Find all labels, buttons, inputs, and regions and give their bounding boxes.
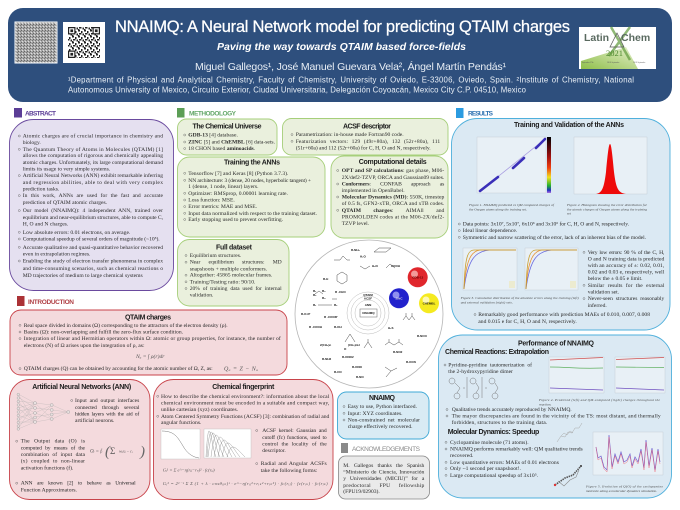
results bullets: data xyxy=(458,220,647,241)
heading: acknowledgements xyxy=(341,443,421,453)
figure 3 caption xyxy=(460,296,580,304)
dataset bullets: 20% of training data used for internal xyxy=(190,285,282,292)
dynamics bullets: Only ~1 second per snapshoot!. xyxy=(450,466,522,472)
dataset bullets xyxy=(185,253,282,299)
heading: performance: Performance of NNAIMQ xyxy=(518,340,595,347)
ACSF bullets xyxy=(291,132,440,152)
chemical universe bullets: GDB-13 [4] database. xyxy=(188,132,238,138)
authors: Miguel Gallegos¹, José Manuel Guevara Vela², Ángel Martín Pendás¹ xyxy=(195,60,506,73)
abstract bullets: and time-consuming scenarios, such as chemical reactions o xyxy=(23,266,163,272)
ANN bullets: activation functions (f). xyxy=(21,464,74,471)
QR code: link xyxy=(63,22,105,63)
figure 3 caption: and external validation (right) sets. xyxy=(461,300,513,304)
heading: chemical fingerprint: Chemical fingerprint xyxy=(212,384,275,391)
heading: results: RESULTS xyxy=(468,110,494,118)
functional group labels: R-OH xyxy=(334,325,342,329)
heading: introduction xyxy=(17,296,74,306)
fingerprint bullets: take the following forms: xyxy=(261,467,318,474)
ANN bullets: The Output data (O) is xyxy=(21,438,85,445)
ACSF bullets: (51r+60a) and 112 (52r+60a) for C, H, O and N, respectively. xyxy=(296,144,431,152)
logo: LatinXChem 2021: 28-30 September xyxy=(633,62,646,64)
dataset bullets: validation. xyxy=(190,293,214,299)
figure 5 caption xyxy=(585,484,663,493)
functional group labels: R₃ xyxy=(322,289,326,293)
fingerprint bullets: chemical environment must be encoded in a suitable and compact way, xyxy=(161,400,330,406)
abstract bullets: Accurate qualitative and quasi-quantitative behavior recovered xyxy=(23,245,163,251)
logo: LatinXChem 2021: Chem xyxy=(621,32,650,44)
figure captions 1 and 2: Figure 1. NNAIMQ predicted vs QM computed charges of xyxy=(468,203,555,207)
molecule sketches xyxy=(315,248,415,377)
heading: introduction: INTRODUCTION xyxy=(28,299,74,306)
abstract bullets: limits its usage to very simple systems. xyxy=(23,166,111,172)
sphere: GDB-13 xyxy=(408,267,428,287)
computational bullets: TZVP level. xyxy=(342,221,370,227)
abstract bullets: MD trajectories of medium to large chemical systems xyxy=(23,272,143,279)
functional group labels: R-ONO2 xyxy=(342,355,354,359)
abstract bullets: equilibrium and near-equilibrium structures, able to compute C, xyxy=(23,215,164,221)
acknowledgement text: (FPU19/02903). xyxy=(343,488,380,495)
heading: methodology xyxy=(177,108,237,118)
heading: training: Training the ANNs xyxy=(224,160,280,166)
abstract bullets: and regression abilities, able to deal with very complex xyxy=(23,180,163,186)
dynamics bullets: recovered. xyxy=(450,453,474,459)
panel: ACSF descriptor xyxy=(282,118,448,155)
heading: methodology: METHODOLOGY xyxy=(189,110,237,117)
reaction bullets: The mayor discrepancies are found in the vicinity of the TS: most distant, and thermally xyxy=(452,412,661,420)
QTAIM bullets: Nₐ = ∫ ρ(r)dr xyxy=(135,353,165,360)
training bullets xyxy=(184,170,318,223)
functional group labels: R -COOH xyxy=(309,325,322,329)
ANN bullets: artificial neurons. xyxy=(75,417,115,424)
results bullets: errors: 0.02 and 0.03 e, respectively, well xyxy=(588,270,665,276)
sphere: ZINC xyxy=(389,288,409,308)
equations: ACSF forms: Gᵢ² = 2¹⁻ᶻ Σ Σ (1 + λ · cosθᵢⱼₖ)ᶻ · e^−η(rᵢⱼ²+rᵢₖ²+rⱼₖ²) · fc(rᵢⱼ) · fc(rᵢₖ) · fc(rⱼₖ) xyxy=(163,481,328,486)
results bullets: errors: and 0.015 e for C, H, O and N, respectively. xyxy=(478,318,577,325)
subheading: chemical reactions: Chemical Reactions: Extrapolation xyxy=(445,349,549,356)
functional group labels: R-NO xyxy=(356,375,364,379)
figure 3: cumulative error curves xyxy=(463,248,578,290)
abstract bullets: The Quantum Theory of Atoms in Molecules (QTAIM) [1] xyxy=(23,146,163,153)
tautomerization bullets xyxy=(444,362,532,375)
functional group labels: H₂S xyxy=(388,326,394,330)
tautomerization bullets: Pyridine-pyridine tautomerization of xyxy=(448,362,532,368)
tautomerization bullets: the 2-hydroxypyridine dimer xyxy=(448,369,513,375)
subheading: molecular dynamics: Molecular Dynamics: Speedup xyxy=(448,429,539,436)
heading: ANN: Artificial Neural Networks (ANN) xyxy=(32,384,131,391)
acknowledgement text: “Ministerio de Ciencia, Innovación xyxy=(343,468,425,476)
computational bullets: of 0.5 fs, GFN2-xTB, ORCA and xTB codes. xyxy=(342,200,445,207)
results bullets: data: Symmetric and narrow scattering of the error, lack of an inherent bias of the model. xyxy=(463,234,647,241)
acknowledgement text: M. Gallegos thanks the Spanish xyxy=(343,463,425,469)
functional group labels: (CH₂)nH xyxy=(348,343,360,347)
dataset bullets: Near equilibrium structures: MD xyxy=(190,260,282,266)
abstract bullets: even in extrapolation regimes. xyxy=(23,252,91,258)
functional group labels: R-OCN xyxy=(406,360,416,364)
fingerprint bullets: Radial and Angular ACSFs xyxy=(261,461,327,467)
NNAIMQ bullets: Easy to use, Python interfaced. xyxy=(348,403,418,410)
chart: cutoff function xyxy=(161,429,200,459)
diagram: neural network xyxy=(17,393,70,430)
sphere: ChEMBL xyxy=(419,293,439,313)
abstract bullets: Artificial Neural Networks (ANN) exhibit remarkable inferring xyxy=(23,172,163,179)
panel: computational details xyxy=(331,156,448,238)
ANN bullets xyxy=(16,397,140,493)
figure 5 caption: Figure 5. Evolution of Q(O) of the cyclopamine xyxy=(585,484,663,488)
abstract bullets: Computational speedup of several orders of magnitude (~10⁵). xyxy=(23,236,160,242)
functional group labels: R-NH₂ xyxy=(351,248,360,252)
fingerprint bullets: Atom Centered Symmetry Functions (ACSF) [3]: combination of radial and xyxy=(161,413,330,420)
results bullets: errors: inferred. xyxy=(588,302,607,309)
abstract bullets: biology. xyxy=(23,140,41,146)
results bullets: errors: Never-seen structures reasonably xyxy=(588,296,665,302)
chemical universe bullets: ZINC [5] and ChEMBL [6] data-sets. xyxy=(188,140,276,146)
abstract bullets: H, O and N charges. xyxy=(23,222,69,228)
abstract bullets: Enabling the study of electron transfer phenomena in complex xyxy=(23,258,163,264)
nested target: NNAIMQ core: QTAIM xyxy=(363,293,373,297)
fingerprint bullets: How to describe the chemical environment?: information about the local xyxy=(161,393,330,400)
NNAIMQ bullets xyxy=(343,403,420,430)
functional group labels: R -CHO xyxy=(335,290,346,294)
molecule: cyclopamine skeletal xyxy=(557,423,582,442)
fingerprint bullets: descriptor. xyxy=(262,448,286,454)
training bullets: Loss function: MSE. xyxy=(188,196,235,204)
dynamics bullets: Low quantitative errors: MAEs of 0.01 electrons xyxy=(450,459,559,466)
ANN bullets: computed by means of the xyxy=(21,444,86,451)
diagram: chemical space circle xyxy=(295,240,443,388)
equations: ACSF forms xyxy=(163,468,328,486)
fingerprint bullets: ACSF kernel: Gaussian and xyxy=(262,428,327,434)
results bullets: errors: O and N training data is predicted xyxy=(588,256,665,262)
training bullets: NN architecture: 3 (dense, 20 nodes, hyperbolic tangent) + xyxy=(188,177,311,184)
ANN bullets: Input and output interfaces xyxy=(75,397,139,404)
training bullets: Early stopping used to prevent overfitting. xyxy=(188,216,284,223)
figure captions 1 and 2: set xyxy=(567,212,572,216)
ANN bullets: combination of input data xyxy=(21,451,86,458)
fingerprint bullets: angular functions. xyxy=(161,419,202,426)
QTAIM bullets: Integration of linear and Hermitian operators within Ω: atomic or group properties, for instance, the number of xyxy=(24,335,281,342)
nested target: NNAIMQ core: NNAIMQ xyxy=(362,311,375,315)
nested target: NNAIMQ core xyxy=(347,292,389,334)
reaction bullets: forbidden, structures to the training data. xyxy=(452,419,548,426)
nested target: NNAIMQ core: ANN xyxy=(365,303,371,307)
functional group labels: 2(CH₂)n xyxy=(320,343,331,347)
QTAIM bullets: QTAIM charges (Q) can be obtained by accounting for the atomic number of Ω, Z, as: xyxy=(24,365,213,372)
functional group labels: H₂N xyxy=(372,264,378,268)
functional group labels: R-ONO xyxy=(352,365,363,369)
results bullets: errors: Similar results for the external xyxy=(588,282,665,289)
figure captions 1 and 2: the Oxygen atoms along the training set. xyxy=(469,207,527,211)
heading: ACSF descriptor: ACSF descriptor xyxy=(343,124,391,130)
NNAIMQ bullets: charge effectively recovered. xyxy=(348,423,413,430)
figure 4 caption xyxy=(538,398,660,406)
abstract bullets: prediction tasks. xyxy=(23,186,60,192)
NNAIMQ bullets: Input: XYZ coordinates. xyxy=(348,411,403,417)
heading: chemical universe: The Chemical Universe xyxy=(192,124,262,130)
ANN bullets: ANN are known [2] to behave as Universal xyxy=(21,481,136,487)
computational bullets: 2X/def2-TZVP, ORCA and Gaussian09 suites. xyxy=(342,174,445,181)
fingerprint bullets: control the locality of the xyxy=(262,440,327,448)
functional group labels: R-NH2 xyxy=(322,357,331,361)
QTAIM bullets: Basins (Ω): non-overlapping and fulfill the zero-flux surface condition. xyxy=(24,328,184,336)
QTAIM bullets: Real space divided in domains (Ω) corresponding to the attractors of the electron density (ρ). xyxy=(24,322,228,329)
affiliations xyxy=(68,76,634,94)
fingerprint bullets: cutoff (fc) functions, used to xyxy=(262,434,327,441)
nested target: NNAIMQ core: ACSF xyxy=(364,296,372,300)
ANN bullets: connected through several xyxy=(75,405,140,411)
NNAIMQ bullets: Non-constrained net molecular xyxy=(348,418,420,424)
figure 5: charge evolution xyxy=(593,432,663,475)
logo: LatinXChem 2021: September 27th xyxy=(582,62,593,64)
logo: LatinXChem 2021: 2021 xyxy=(606,48,623,58)
QTAIM bullets: electrons (N) of Ω arises upon the integration of ρ, as: xyxy=(24,342,145,349)
dynamics bullets: NNAIMQ performs remarkably well: QM qualitative trends xyxy=(450,446,583,452)
dataset bullets: Altogether: 45865 molecular frames. xyxy=(190,272,273,279)
panel: QTAIM charges xyxy=(10,310,287,375)
training bullets: Tensorflow [7] and Keras [8] (Python 3.7.3). xyxy=(188,170,289,177)
figure 4 caption: Figure 4. Predicted (left) and QM-computed (right) charges throughout the xyxy=(538,398,660,402)
sphere: ChEMBL: CHEMBL xyxy=(423,301,436,305)
functional group labels: R-NO2 xyxy=(393,350,403,354)
heading: training and validation: Training and Validation of the ANNs xyxy=(514,122,624,129)
panel: training the ANNs xyxy=(178,157,325,237)
computational bullets: PROMOLDEN codes at the M06-2X/def2- xyxy=(342,214,444,220)
acknowledgement text: y Universidades (MICIU)” for a xyxy=(343,475,425,482)
fingerprint bullets: unlike cartesian (xyz) coordinates. xyxy=(161,406,239,413)
dynamics bullets: Cyclopamine molecule (71 atoms). xyxy=(450,439,529,446)
results bullets: errors: with an accuracy of ±: 0.02, 0.01, xyxy=(588,262,665,269)
functional group labels: R₁ xyxy=(313,303,317,307)
computational bullets: QTAIM charges: AIMAll and xyxy=(342,208,445,214)
dataset bullets: snapshoots + multiple conformers. xyxy=(190,265,268,272)
training bullets: Error metrics: MAE and MSE. xyxy=(188,204,258,210)
acknowledgement text: predoctoral FPU fellowship xyxy=(343,482,425,489)
figure 4 caption: reaction. xyxy=(539,402,552,406)
abstract bullets: allows the computation of rigorous and chemically appealing xyxy=(23,152,163,159)
functional group labels: R-O-R' xyxy=(301,312,311,316)
panel: acknowledgements xyxy=(338,456,430,499)
panel: chemical universe xyxy=(178,119,277,155)
functional group labels: R₄ xyxy=(322,296,326,300)
sphere: ZINC: ZINC xyxy=(396,296,403,300)
figure 3 caption: Figure 3. Cumulative distribution of the absolute errors along the training (left) xyxy=(460,296,580,300)
functional group labels: COOH xyxy=(391,264,400,268)
subtitle: Paving the way towards QTAIM based force-fields xyxy=(217,41,466,53)
equation: neuron output xyxy=(90,444,145,460)
functional group labels: O xyxy=(344,347,347,351)
dynamics bullets xyxy=(445,439,583,479)
ACSF bullets: Parametrization: in-house made Fortran90 code. xyxy=(296,132,404,138)
fingerprint bullets xyxy=(157,393,330,474)
computational bullets: Conformers: CONFAB approach as xyxy=(342,182,444,188)
training bullets: Optimizer: RMSprop, 0.00001 learning rate. xyxy=(188,191,288,197)
functional group labels: R₂ xyxy=(313,293,317,297)
acknowledgement text xyxy=(343,463,425,495)
figure captions 1 and 2: the atomic charges of Oxygen atoms along the training xyxy=(567,207,647,211)
abstract bullets: Our model (NNAIMQ): 4 independent ANN, trained over xyxy=(23,207,163,214)
functional group labels: R-H xyxy=(323,277,328,281)
chemical universe bullets xyxy=(184,132,276,152)
reaction bullets: Qualitative trends accurately reproduced by NNAIMQ. xyxy=(452,407,572,413)
figure captions 1 and 2: Figure 2. Histogram showing the error distribution for xyxy=(566,203,648,207)
panel: NNAIMQ xyxy=(338,392,429,439)
figure 1: parity scatter xyxy=(477,137,551,193)
chemical universe bullets: 18 CHON based aminoacids. xyxy=(188,146,256,152)
logo: LatinXChem 2021: 28-30 September xyxy=(607,62,620,64)
abstract bullets xyxy=(18,132,164,279)
header banner xyxy=(8,8,672,102)
chart: radial functions xyxy=(204,429,251,458)
functional group labels xyxy=(301,248,427,379)
results bullets: errors: below the ± 0.05 e limit. xyxy=(588,276,643,282)
heading: NNAIMQ: NNAIMQ xyxy=(369,395,396,402)
equations: ACSF forms: Gᵢ¹ = Σ e^−η(rᵢⱼ−rₛ)² · fc(rᵢⱼ) xyxy=(163,468,215,472)
heading: abstract: ABSTRACT xyxy=(25,110,56,118)
results bullets: errors: validation set. xyxy=(588,290,620,296)
training bullets: Input data normalized with respect to the training dataset. xyxy=(188,211,318,217)
equation: neuron output: Σ xyxy=(110,446,115,456)
abstract bullets: Low absolute errors: 0.01 electrons, on average. xyxy=(23,230,131,236)
QR code: noise xyxy=(15,22,57,63)
functional group labels: R₂ xyxy=(334,303,338,307)
ANN bullets: (x) coupled to non-linear xyxy=(21,458,85,465)
abstract bullets: prediction of QTAIM atomic charges. xyxy=(23,199,108,206)
dynamics bullets: Large computational speedup of 3x10⁵. xyxy=(450,472,539,479)
abstract bullets: In this work, ANNs are used for the fast and accurate xyxy=(23,192,164,199)
panel: training and validation xyxy=(452,118,670,330)
heading: full dataset: Full dataset xyxy=(216,244,253,252)
heading: results xyxy=(456,108,494,118)
reaction scheme xyxy=(449,377,498,399)
ANN bullets: hidden layers with the aid of xyxy=(75,410,139,418)
computational bullets: implemented in OpenBabel. xyxy=(342,188,405,194)
reaction bullets xyxy=(446,407,661,426)
figure 5 caption: molecule along a molecular dynamics simulation. xyxy=(586,489,657,493)
equation: neuron output: Oᵢ = fᵢ xyxy=(90,450,103,454)
heading: QTAIM charges: QTAIM charges xyxy=(125,314,171,322)
panel: chemical fingerprint xyxy=(154,380,333,500)
heading: abstract xyxy=(14,108,56,118)
figure 4: predicted charges xyxy=(549,357,665,393)
functional group labels: R -COOR' xyxy=(324,315,338,319)
ANN bullets: Function Approximators. xyxy=(21,487,78,493)
colorbar xyxy=(547,137,551,193)
heading: computational details: Computational details xyxy=(359,159,427,166)
panel: full dataset xyxy=(178,240,289,306)
heading: acknowledgements: ACKNOWLEDGEMENTS xyxy=(352,446,421,453)
abstract bullets: Atomic charges are of crucial importance in chemistry and xyxy=(23,132,163,140)
dataset bullets: Training/Testing ratio: 90/10. xyxy=(190,279,256,285)
results bullets: errors: Very low errors: 90 % of the C, H, xyxy=(588,249,665,256)
functional group labels: R-CN xyxy=(334,370,342,374)
results bullets: errors xyxy=(474,249,665,325)
training bullets: 1 (dense, 1 node, linear) layers. xyxy=(188,183,259,190)
dataset bullets: Equilibrium structures. xyxy=(190,253,242,259)
results bullets: errors: Remarkably good performance with prediction MAEs of 0.010, 0.007, 0.008 xyxy=(478,311,650,318)
computational bullets: Molecular Dynamics (MD): 550K, timestep xyxy=(342,194,445,200)
figure captions 1 and 2 xyxy=(468,203,648,216)
logo: LatinXChem 2021: Latin xyxy=(584,32,609,44)
affiliations: ¹Department of Physical and Analytical Chemistry, Faculty of Chemistry, University of Oviedo, E-33006, Oviedo, Spain. ²Institute of Chemistry, National xyxy=(68,76,634,84)
panel: artificial neural networks xyxy=(10,380,150,500)
title: NNAIMQ: A Neural Network model for predicting QTAIM charges xyxy=(115,18,570,36)
logo: LatinXChem 2021 xyxy=(579,27,656,69)
results bullets: data: Ideal linear dependence. xyxy=(463,228,518,234)
molecule: cyclopamine 3D xyxy=(554,465,582,486)
functional group labels: H₂O xyxy=(360,254,366,258)
equation: neuron output: ) xyxy=(139,444,145,460)
equation: neuron output: ( xyxy=(105,444,111,460)
affiliations: Autonomous University of Mexico, Circuito Exterior, Ciudad Universitaria, Delegación Coyoacán, Mexico City C.P. 04510, Mexico xyxy=(68,86,527,94)
ACSF bullets: Featurization vectors: 129 (49r+80a), 132 (52r+80a), 111 xyxy=(296,138,440,145)
functional group labels: R₁ xyxy=(313,289,317,293)
figure 2: error histogram xyxy=(574,137,647,194)
QTAIM bullets xyxy=(19,322,281,372)
sphere: GDB-13: GDB-13 xyxy=(412,275,424,279)
computational bullets xyxy=(337,168,445,227)
panel: abstract xyxy=(10,120,174,290)
QTAIM bullets: Qₐ = Z − Nₐ xyxy=(224,366,258,372)
abstract bullets: atomic charges. Unfortunately, its large computational demand xyxy=(23,159,163,166)
computational bullets: OPT and SP calculations: gas phase, M06- xyxy=(342,168,444,174)
equation: neuron output: wᵢⱼxⱼ − cᵢ xyxy=(119,448,133,454)
results bullets: data: Data points: 3x10⁷, 5x10⁷, 6x10⁶ and 3x10⁶ for C, H, O and N, respectively. xyxy=(463,220,630,228)
functional group labels: R-NCO xyxy=(417,334,427,338)
panel: performance of NNAIMQ xyxy=(438,335,672,498)
